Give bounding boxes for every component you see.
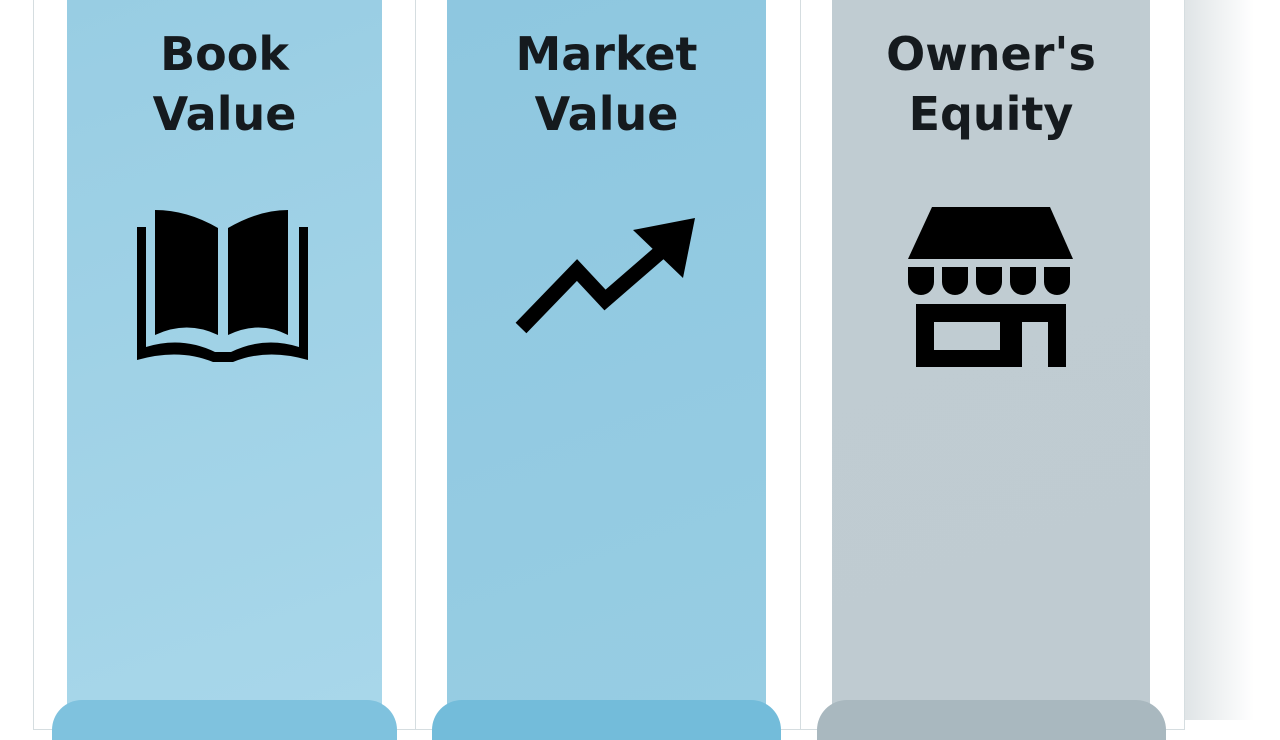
heading: book value: [152, 27, 296, 141]
panel: market value: [447, 0, 766, 705]
icon: trending arrow: [516, 218, 695, 334]
icon: open book: [137, 210, 308, 362]
right shadow: [1184, 0, 1254, 720]
heading: owner's equity: Owner's: [886, 27, 1096, 81]
heading: owner's equity: [886, 27, 1096, 141]
icon: storefront: [908, 207, 1073, 367]
heading: market value: [515, 27, 698, 141]
heading: book value: Value: [153, 87, 296, 141]
heading: book value: Book: [160, 27, 289, 81]
bottom tabs: [52, 700, 397, 740]
heading: market value: Market: [515, 27, 698, 81]
panel: owner's equity: [832, 0, 1150, 705]
heading: owner's equity: Equity: [909, 87, 1073, 141]
heading: market value: Value: [535, 87, 678, 141]
panel: book value: [67, 0, 382, 705]
card outlines: [33, 0, 416, 730]
